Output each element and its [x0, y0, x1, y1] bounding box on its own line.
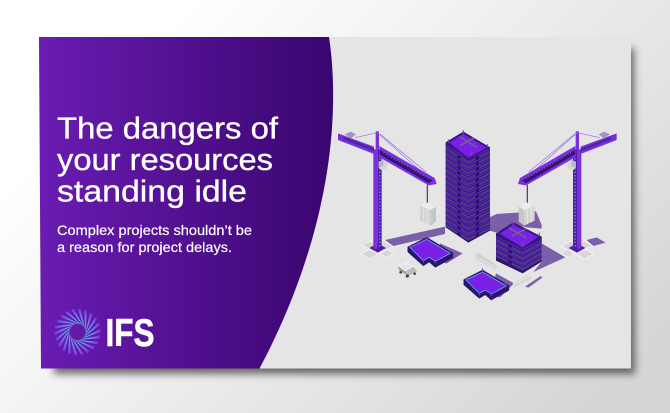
- short tower: [496, 221, 542, 273]
- crane: right: [518, 131, 617, 259]
- crane mast: [373, 131, 382, 249]
- foundation pit: front: [464, 268, 508, 299]
- counterweight: [345, 132, 356, 139]
- title: standing idle: [57, 174, 247, 208]
- main jib: [379, 146, 437, 185]
- title: your resources: [57, 142, 273, 177]
- icon: spiral burst: [54, 309, 101, 355]
- IFS logo: [54, 309, 154, 355]
- suspended concrete block: [420, 202, 436, 226]
- title: [57, 110, 278, 208]
- stacked beams: [475, 253, 497, 270]
- tall tower roof: [446, 132, 490, 160]
- crane cables: [355, 133, 426, 174]
- card shadow: [50, 48, 635, 374]
- crane base slabs: [361, 241, 393, 259]
- concrete plank: [513, 274, 532, 288]
- counter jib: [338, 133, 374, 154]
- subtitle: a reason for project delays.: [57, 239, 232, 255]
- construction illustration: [338, 130, 617, 299]
- panel: light card: [39, 37, 631, 368]
- logo wordmark: IFS: [106, 312, 154, 355]
- hook line: [426, 185, 429, 204]
- subtitle: Complex projects shouldn’t be: [57, 222, 252, 238]
- dump truck: [398, 263, 417, 278]
- title: The dangers of: [57, 110, 278, 146]
- tall tower: [446, 130, 490, 243]
- ground shadows: [385, 211, 606, 297]
- crane: left: [338, 131, 437, 259]
- panel: purple curved block: [39, 37, 333, 368]
- short tower roof: [496, 222, 542, 250]
- subtitle: [57, 222, 252, 255]
- foundation pit: left: [408, 235, 452, 267]
- crane cab: [379, 160, 388, 171]
